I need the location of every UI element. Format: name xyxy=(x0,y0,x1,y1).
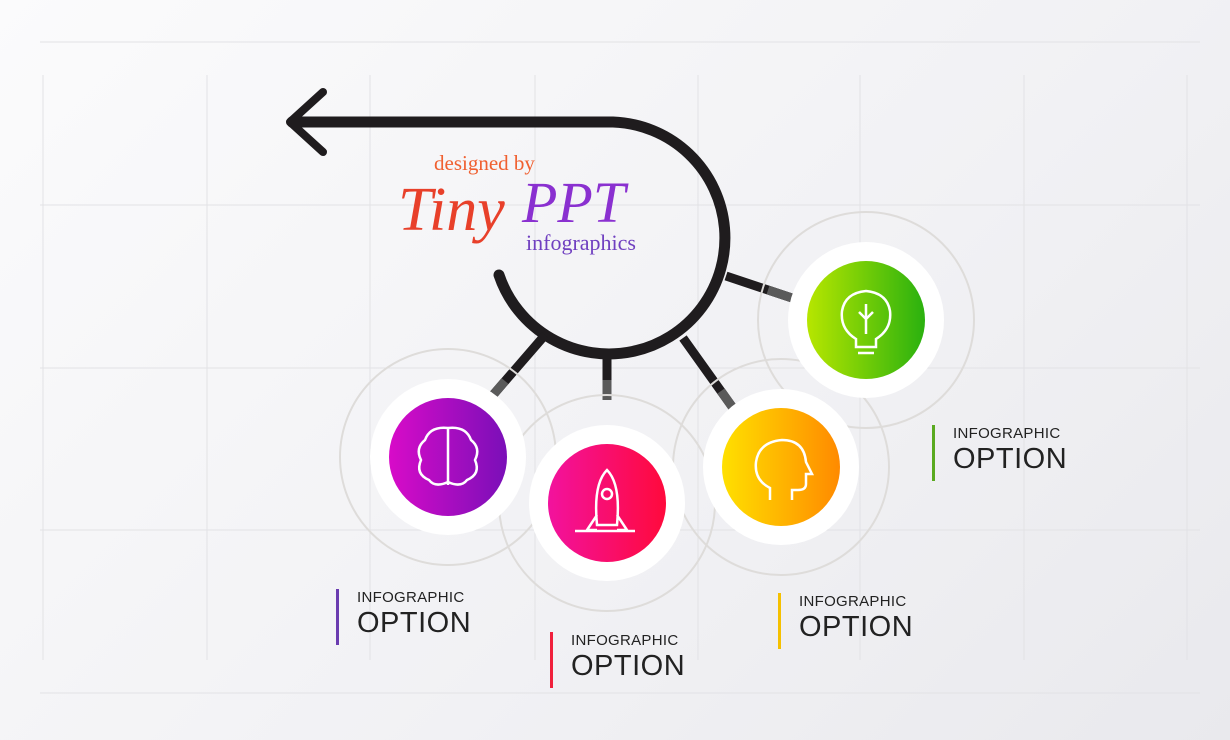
label: pink option: OPTION xyxy=(571,650,685,682)
icon: rocket (pink) xyxy=(548,444,666,562)
icon: brain (purple) xyxy=(389,398,507,516)
logo text: infographics xyxy=(526,230,636,255)
label: pink option: INFOGRAPHIC xyxy=(571,632,678,649)
label: purple option: OPTION xyxy=(357,607,471,639)
logo text xyxy=(398,151,636,255)
label: green option xyxy=(932,425,1067,481)
label: yellow option: OPTION xyxy=(799,611,913,643)
outer rings xyxy=(340,212,974,611)
icon: head puzzle (yellow) xyxy=(722,408,840,526)
label: pink option xyxy=(550,632,685,688)
logo text: PPT xyxy=(521,170,629,235)
label: purple option xyxy=(336,589,471,645)
label: purple option: INFOGRAPHIC xyxy=(357,589,464,606)
label: yellow option xyxy=(778,593,913,649)
label: yellow option: INFOGRAPHIC xyxy=(799,593,906,610)
arrow: main curve xyxy=(290,92,795,408)
label: green option: INFOGRAPHIC xyxy=(953,425,1060,442)
logo text: Tiny xyxy=(398,176,505,244)
icon: bulb (green) xyxy=(807,261,925,379)
logo text: designed by xyxy=(434,151,535,175)
label: green option: OPTION xyxy=(953,443,1067,475)
